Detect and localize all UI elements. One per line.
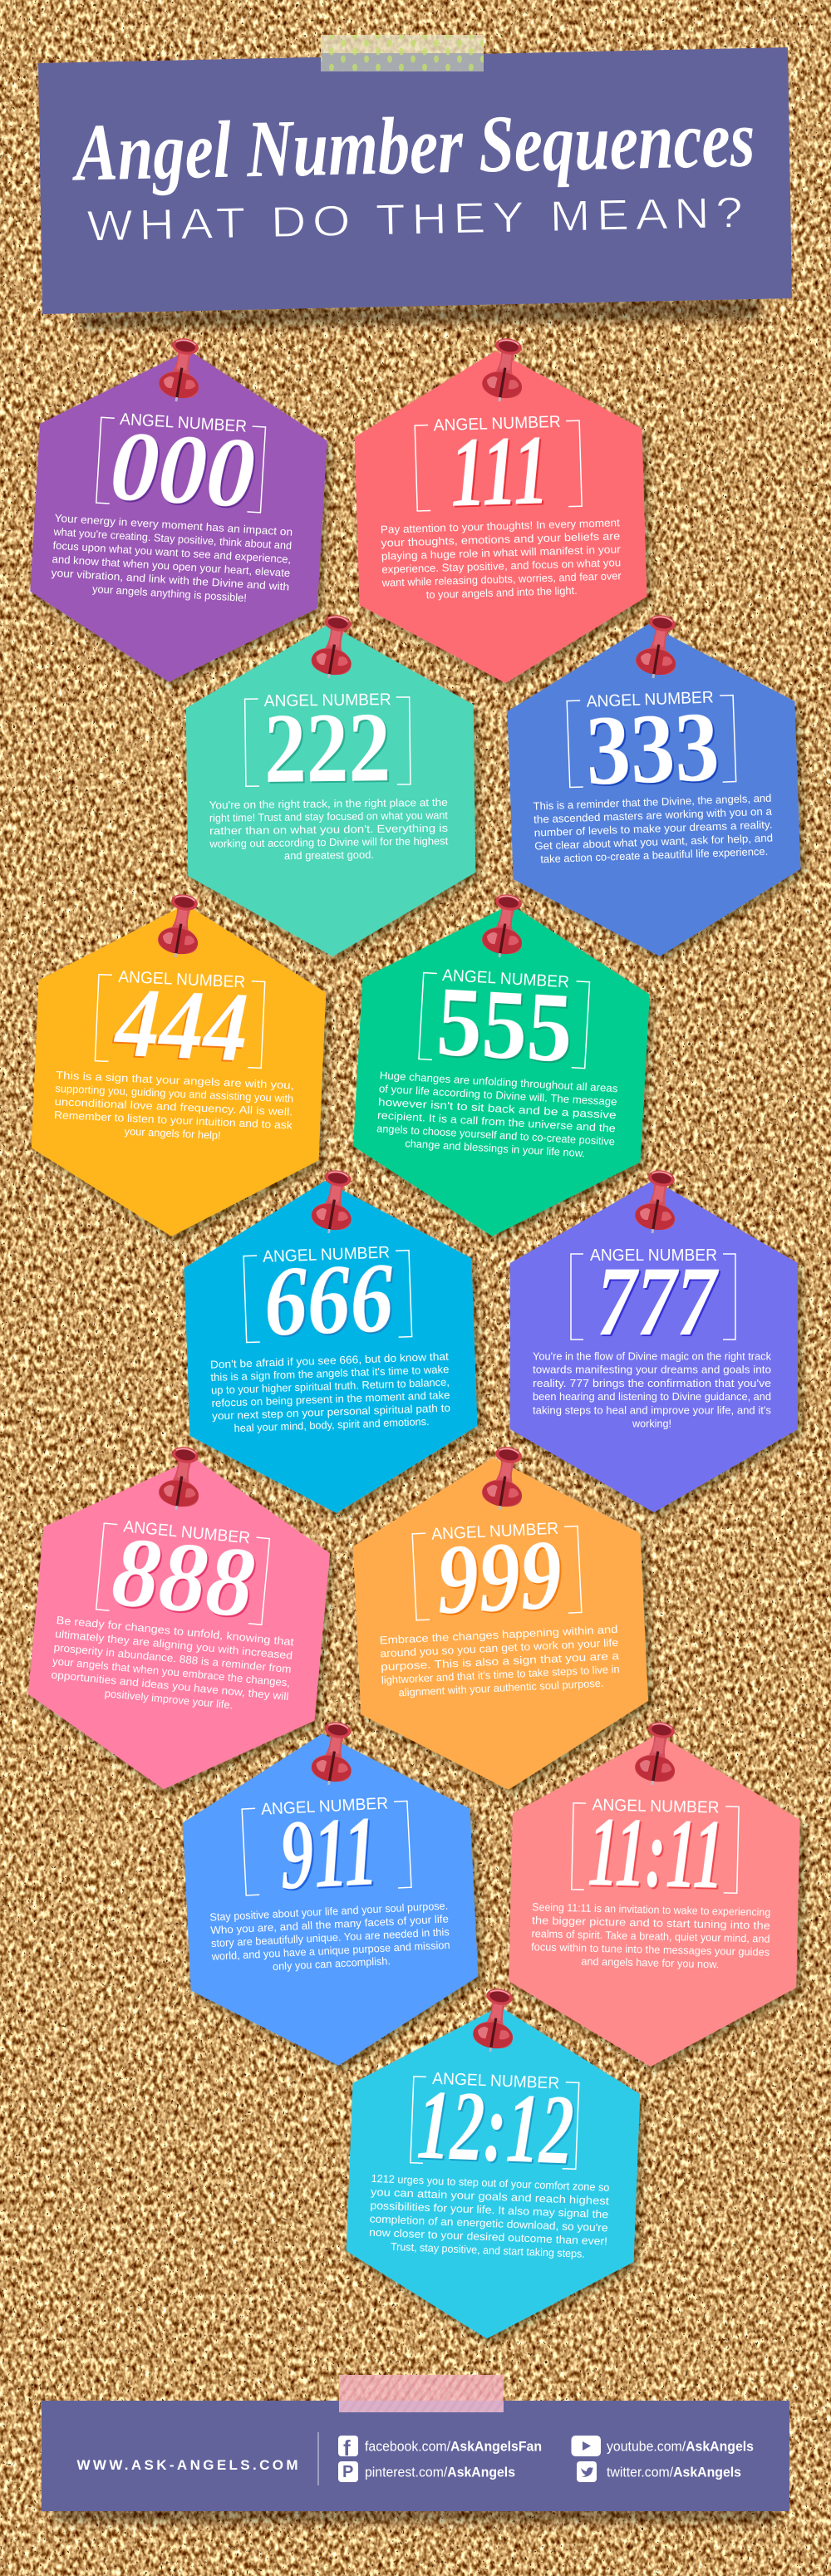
- description: your angels for help!: [124, 1125, 221, 1142]
- description: heal your mind, body, spirit and emotions.: [234, 1415, 430, 1434]
- description: story are beautifully unique. You are needed in this: [211, 1925, 450, 1949]
- footer panel: [42, 2401, 789, 2523]
- pushpin 222: [309, 612, 359, 681]
- description: want while releasing doubts, worries, and fear over: [381, 569, 622, 589]
- label: ANGEL NUMBER: [122, 1517, 251, 1547]
- number: 777: [597, 1246, 719, 1356]
- pushpin 000: [156, 336, 206, 405]
- description: refocus on being present in the moment and take: [211, 1389, 450, 1409]
- description: purpose. This is also a sign that you are a: [381, 1649, 620, 1673]
- facebook link: facebook.com/AskAngelsFan: [365, 2438, 542, 2455]
- number: 333: [584, 691, 721, 806]
- panel: angel number 911: [179, 1727, 482, 2072]
- pushpin 999: [479, 1444, 529, 1513]
- description: Trust, stay positive, and start taking steps.: [391, 2240, 585, 2260]
- description: your next step on your personal spiritual path to: [212, 1402, 450, 1423]
- description: around you so you can get to work on your life: [380, 1636, 618, 1659]
- description: realms of spirit. Take a breath, quiet your mind, and: [531, 1927, 770, 1945]
- description: Don't be afraid if you see 666, but do know that: [210, 1350, 449, 1371]
- number: 11:11: [587, 1796, 725, 1910]
- bracket: [567, 696, 736, 788]
- description: take action co-create a beautiful life experience.: [540, 845, 768, 865]
- description: number of levels to make your dreams a reality.: [534, 819, 773, 839]
- description: [531, 1900, 771, 1972]
- panel: angel number 555: [349, 897, 654, 1244]
- description: this is a sign from the angels that it's time to wake: [210, 1363, 450, 1384]
- description: [49, 1614, 295, 1717]
- number: 999: [435, 1519, 564, 1635]
- description: however isn't to sit back and be a passive: [378, 1095, 617, 1121]
- description: [379, 1623, 622, 1699]
- pushpin 12:12: [470, 1986, 520, 2055]
- panel: angel number 333: [504, 619, 804, 961]
- bracket: [419, 973, 589, 1069]
- panel: angel number 777: [510, 1180, 798, 1512]
- description: [210, 1350, 451, 1435]
- description: Remember to listen to your intuition and to ask: [54, 1109, 293, 1132]
- website url: WWW.ASK-ANGELS.COM: [76, 2457, 297, 2473]
- label: ANGEL NUMBER: [261, 1794, 389, 1819]
- panel: angel number 666: [181, 1176, 480, 1518]
- description: towards manifesting your dreams and goals into: [533, 1364, 771, 1376]
- description: experience. Stay positive, and focus on what you: [381, 556, 621, 576]
- description: You're on the right track, in the right place at the: [209, 796, 448, 811]
- panel: angel number 444: [27, 898, 330, 1242]
- panel: angel number 000: [25, 342, 332, 691]
- description: the bigger picture and to start tuning into the: [532, 1914, 770, 1932]
- description: and greatest good.: [284, 848, 374, 862]
- description: rather than on what you don't. Everything is: [209, 822, 449, 837]
- icon: facebook: [338, 2436, 358, 2460]
- description: [533, 792, 774, 866]
- label: ANGEL NUMBER: [118, 968, 246, 991]
- description: and know that when you open your heart, elevate: [52, 553, 291, 579]
- bracket: [96, 1523, 269, 1625]
- description: Your energy in every moment has an impact on: [54, 512, 293, 538]
- icon: pinterest: P: [342, 2463, 353, 2481]
- icon: facebook: f: [343, 2436, 351, 2460]
- bracket: [411, 2077, 579, 2169]
- pushpin 911: [309, 1719, 359, 1788]
- bracket: [96, 417, 266, 513]
- pushpin 111: [479, 336, 529, 405]
- bracket: [242, 1801, 411, 1895]
- number: 911: [278, 1795, 380, 1910]
- label: ANGEL NUMBER: [120, 410, 248, 436]
- bracket: [245, 697, 411, 786]
- bracket: [95, 975, 265, 1068]
- description: Be ready for changes to unfold, knowing that: [56, 1614, 295, 1648]
- description: completion of an energetic download, so you're: [369, 2212, 608, 2234]
- label: ANGEL NUMBER: [592, 1796, 720, 1817]
- description: Huge changes are unfolding throughout all areas: [379, 1069, 618, 1094]
- label: ANGEL NUMBER: [590, 1246, 717, 1265]
- pushpin 777: [632, 1168, 682, 1236]
- panel: angel number 11:11: [507, 1731, 802, 2070]
- number: 444: [112, 966, 250, 1083]
- description: working!: [632, 1418, 671, 1429]
- description: what you're creating. Stay positive, think about and: [52, 525, 293, 552]
- description: [209, 1900, 451, 1976]
- subtitle: WHAT DO THEY MEAN?: [86, 189, 750, 251]
- description: playing a huge role in what will manifest in your: [381, 543, 622, 563]
- description: world, and you have a unique purpose and mission: [210, 1939, 450, 1963]
- panel: angel number 12:12: [343, 2001, 643, 2344]
- description: lightworker and that it's time to take steps to live in: [381, 1663, 620, 1686]
- description: alignment with your authentic soul purpose.: [398, 1677, 604, 1698]
- description: working out according to Divine will for the highest: [209, 834, 449, 850]
- description: prosperity in abundance. 888 is a reminder from: [53, 1641, 292, 1675]
- description: recipient. It is a call from the universe and the: [377, 1109, 616, 1134]
- description: focus upon what you want to see and experience,: [52, 539, 292, 566]
- panel: angel number 111: [352, 347, 649, 687]
- description: Stay positive about your life and your soul purpose.: [209, 1900, 448, 1924]
- description: unconditional love and frequency. All is well.: [54, 1095, 293, 1118]
- pushpin 444: [155, 892, 205, 961]
- bracket: [412, 1526, 582, 1620]
- description: [380, 516, 622, 602]
- description: positively improve your life.: [104, 1687, 234, 1711]
- icon: twitter: [577, 2461, 597, 2482]
- description: ultimately they are aligning you with increased: [55, 1627, 293, 1662]
- icon: youtube: [572, 2436, 601, 2456]
- bracket: [571, 1254, 735, 1340]
- description: opportunities and ideas you have now, they will: [51, 1669, 289, 1703]
- description: [49, 512, 293, 607]
- youtube link: youtube.com/AskAngels: [607, 2438, 754, 2455]
- panel: angel number 222: [185, 622, 476, 958]
- description: now closer to your desired outcome than ever!: [369, 2226, 607, 2248]
- pushpin 333: [633, 612, 683, 681]
- label: ANGEL NUMBER: [442, 966, 570, 991]
- description: [533, 1349, 771, 1429]
- description: This is a sign that your angels are with you,: [56, 1069, 294, 1092]
- description: Pay attention to your thoughts! In every moment: [381, 516, 620, 536]
- description: 1212 urges you to step out of your comfort zone so: [371, 2172, 610, 2194]
- header panel: [38, 47, 792, 329]
- description: been hearing and listening to Divine guidance, and: [533, 1390, 771, 1403]
- panel: angel number 888: [21, 1445, 337, 1802]
- number: 222: [263, 691, 391, 804]
- pushpin 555: [479, 892, 529, 961]
- description: possibilities for your life. It also may signal the: [370, 2199, 608, 2220]
- description: This is a reminder that the Divine, the angels, and: [533, 792, 772, 813]
- label: ANGEL NUMBER: [432, 2070, 560, 2092]
- bracket: [243, 1251, 412, 1343]
- description: [376, 1069, 618, 1161]
- description: right time! Trust and stay focused on what you want: [209, 809, 448, 824]
- description: You're in the flow of Divine magic on the right track: [533, 1349, 771, 1363]
- label: ANGEL NUMBER: [431, 1520, 559, 1544]
- description: taking steps to heal and improve your life, and it's: [533, 1404, 771, 1416]
- description: your thoughts, emotions and your beliefs are: [381, 529, 620, 549]
- bracket: [415, 420, 582, 511]
- description: Seeing 11:11 is an invitation to wake to experiencing: [532, 1900, 770, 1919]
- number: 555: [434, 966, 576, 1084]
- description: you can attain your goals and reach highest: [371, 2185, 610, 2207]
- description: angels to choose yourself and to co-create positive: [376, 1122, 615, 1148]
- description: your vibration, and link with the Divine and with: [51, 567, 290, 593]
- description: your angels anything is possible!: [92, 583, 247, 604]
- description: [368, 2172, 610, 2261]
- number: 666: [263, 1241, 395, 1357]
- label: ANGEL NUMBER: [264, 691, 391, 710]
- pushpin 666: [309, 1168, 359, 1236]
- description: supporting you, guiding you and assisting you with: [55, 1082, 293, 1105]
- description: focus within to tune into the messages your guides: [531, 1940, 770, 1959]
- description: Get clear about what you want, ask for help, and: [534, 832, 773, 853]
- description: up to your higher spiritual truth. Return to balance,: [211, 1376, 450, 1397]
- description: change and blessings in your life now.: [405, 1137, 585, 1159]
- label: ANGEL NUMBER: [263, 1243, 390, 1266]
- description: your angels that when you embrace the changes,: [52, 1654, 291, 1689]
- pinterest link: pinterest.com/AskAngels: [365, 2465, 515, 2480]
- bracket: [572, 1803, 739, 1893]
- icon: pinterest: [338, 2461, 358, 2482]
- panel: angel number 999: [349, 1451, 652, 1797]
- description: only you can accomplish.: [273, 1954, 391, 1973]
- pushpin 888: [156, 1444, 206, 1513]
- description: to your angels and into the light.: [426, 584, 578, 601]
- tape: green dots: [321, 35, 484, 71]
- label: ANGEL NUMBER: [433, 413, 561, 435]
- twitter link: twitter.com/AskAngels: [607, 2465, 741, 2480]
- description: Who you are, and all the many facets of your life: [210, 1912, 449, 1936]
- description: [209, 796, 449, 863]
- pushpin 11:11: [632, 1719, 682, 1788]
- description: reality. 777 brings the confirmation that you've: [533, 1377, 771, 1389]
- number: 12:12: [416, 2069, 576, 2185]
- number: 111: [449, 414, 550, 528]
- description: of your life according to Divine will. The message: [379, 1082, 617, 1108]
- number: 000: [108, 410, 258, 528]
- description: [53, 1069, 295, 1145]
- description: Embrace the changes happening within and: [379, 1623, 618, 1646]
- label: ANGEL NUMBER: [586, 688, 714, 711]
- tape: pink stripes: [339, 2375, 504, 2412]
- description: and angels have for you now.: [581, 1955, 719, 1970]
- number: 888: [108, 1516, 258, 1639]
- description: the ascended masters are working with you on a: [534, 805, 773, 826]
